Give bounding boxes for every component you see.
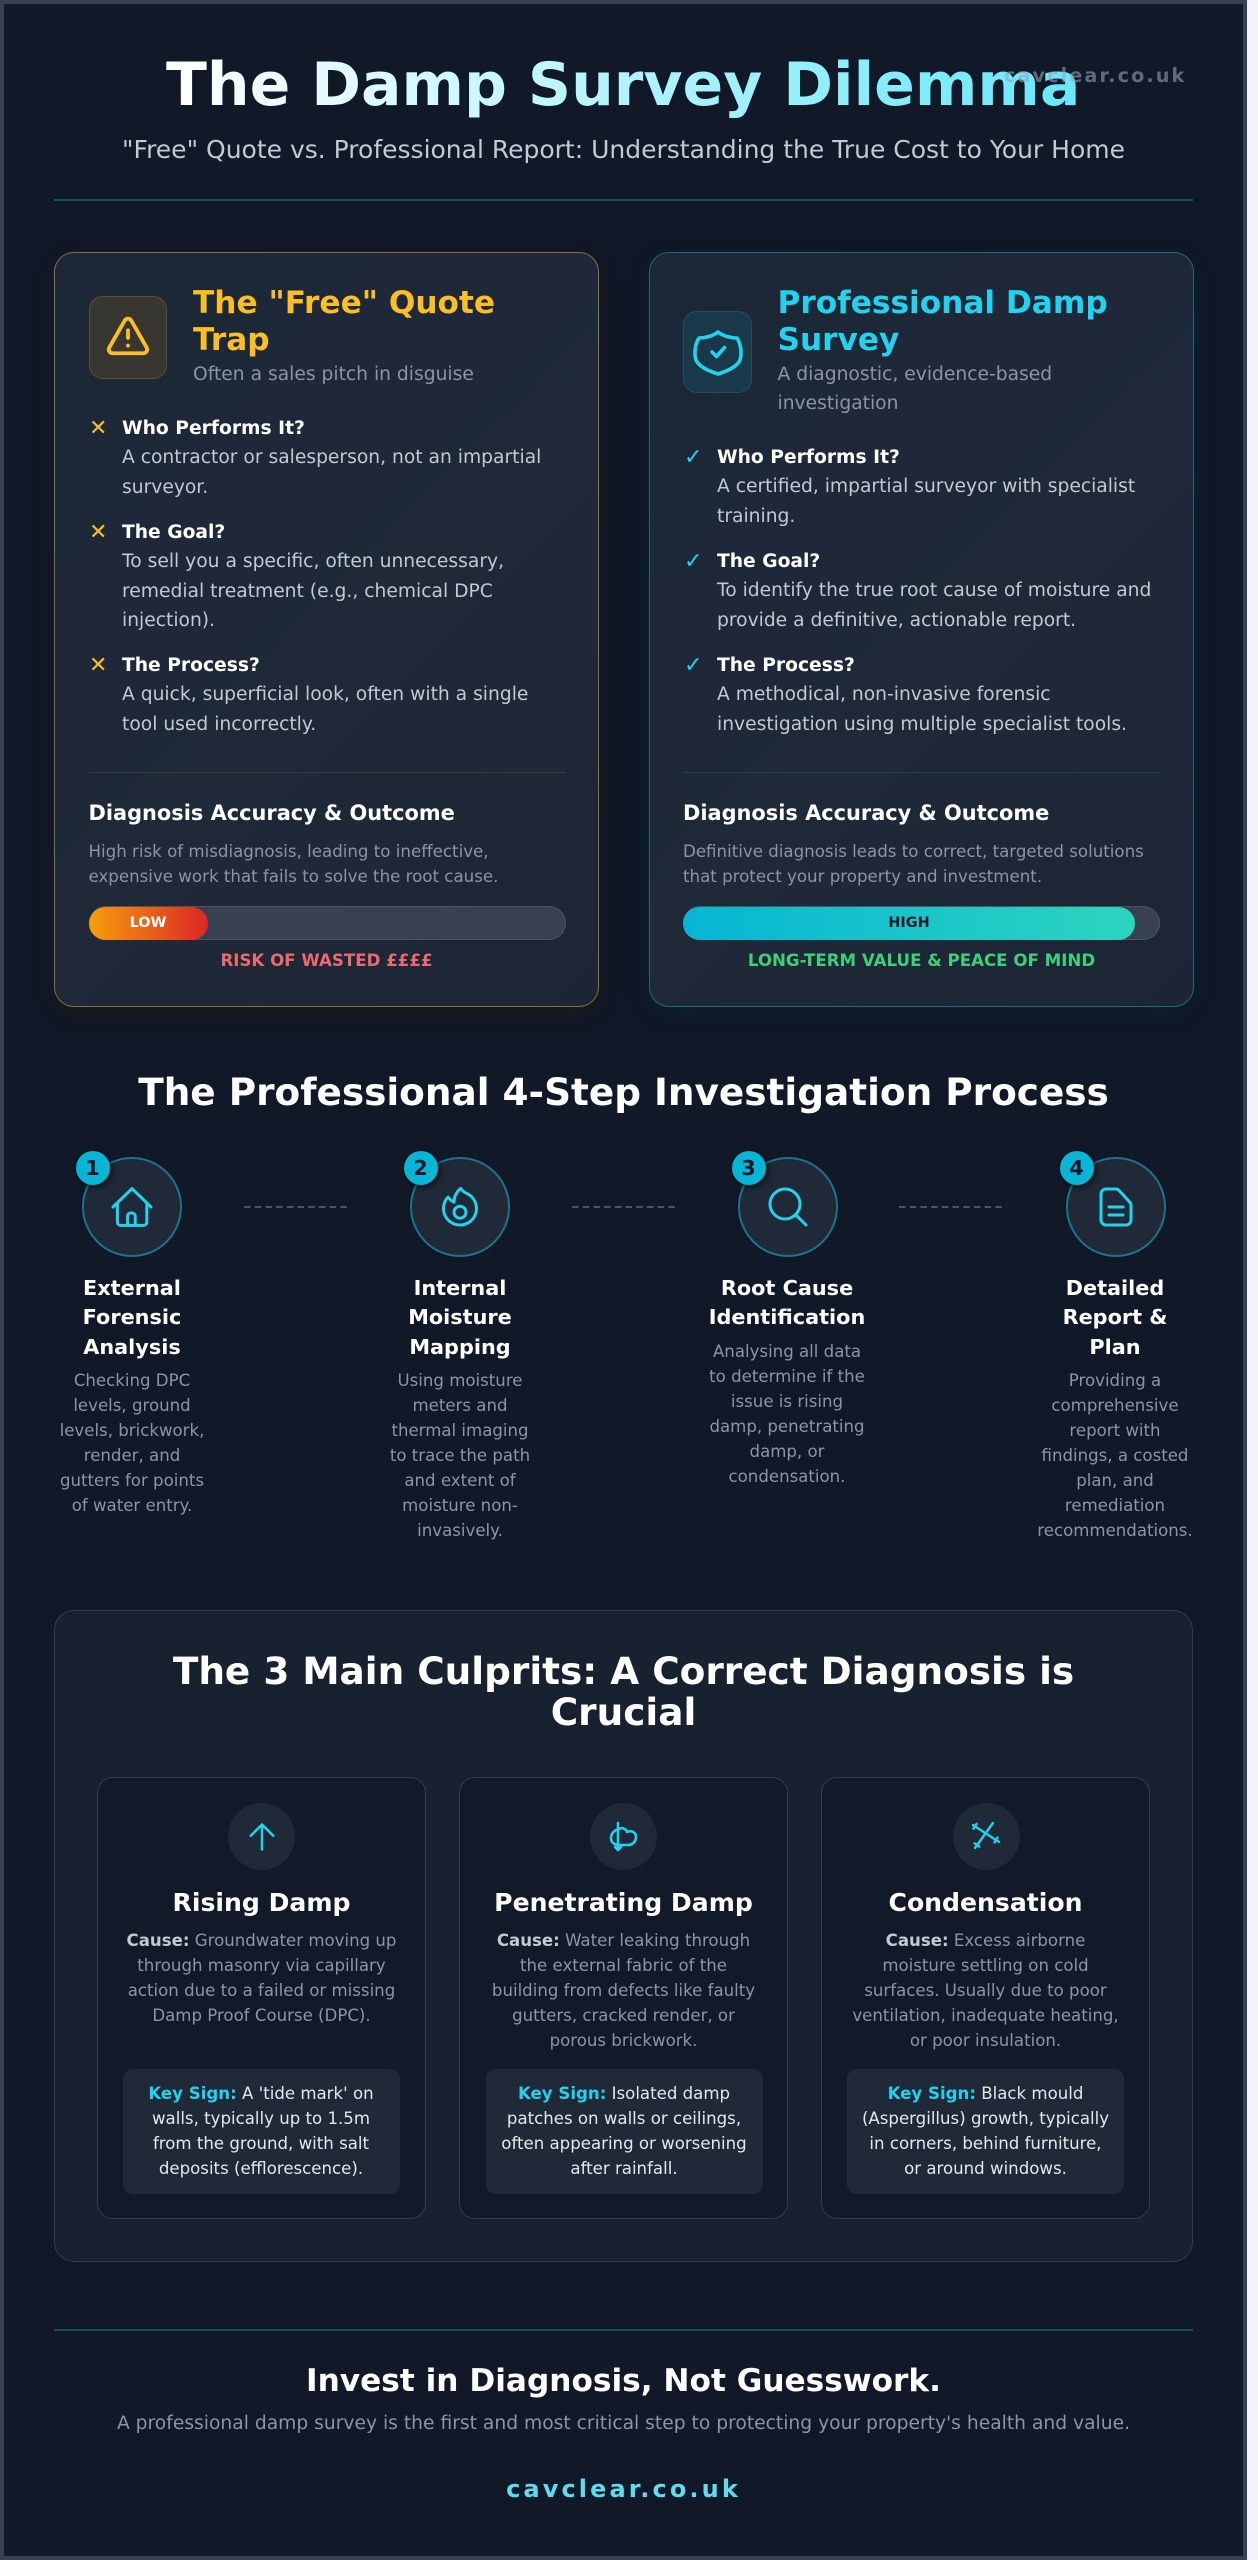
key sign: condensation: or around windows.	[904, 2159, 1067, 2178]
key sign: condensation: in corners, behind furniture,	[869, 2134, 1102, 2153]
list item: the process	[717, 655, 1127, 735]
step 2 text: to trace the path	[390, 1446, 530, 1465]
list mark: who: ✓	[684, 445, 702, 470]
cause: rising damp: action due to a failed or missing	[128, 1981, 395, 2000]
step 1 text: render, and	[84, 1446, 180, 1465]
cause: condensation: Cause: Excess airborne	[886, 1931, 1085, 1950]
cause: penetrating damp: gutters, cracked render, or	[512, 2006, 735, 2025]
footer url: cavclear.co.uk	[506, 2475, 741, 2503]
step 4 text: Providing a	[1069, 1371, 1161, 1390]
cause: rising damp: Damp Proof Course (DPC).	[152, 2006, 371, 2025]
cause: penetrating damp: building from defects like faulty	[492, 1981, 755, 2000]
cause: condensation: or poor insulation.	[910, 2031, 1061, 2050]
list item: who performs it: training.	[717, 506, 795, 527]
step 4 title: Detailed	[1066, 1276, 1164, 1300]
list item: who performs it	[717, 447, 1135, 527]
step 4 text: findings, a costed	[1042, 1446, 1188, 1465]
step 2 title	[408, 1276, 512, 1359]
icon: shield check	[683, 311, 752, 393]
panel: culprits	[54, 1610, 1193, 2262]
key sign: rising damp	[122, 2069, 400, 2194]
card: penetrating damp	[459, 1777, 788, 2219]
list item: the goal	[716, 551, 1151, 631]
heading: professional damp survey: Professional Damp	[778, 285, 1108, 321]
watermark: cavclear.co.uk	[1004, 64, 1186, 87]
step 4 badge	[1060, 1150, 1094, 1184]
step 1 text: levels, ground	[73, 1396, 191, 1415]
bar: high accuracy	[683, 906, 1160, 940]
step 4 title: Plan	[1089, 1335, 1141, 1359]
step 1 text	[60, 1371, 204, 1515]
step 2 title: Mapping	[409, 1335, 511, 1359]
list item: who performs it: Who Performs It?	[717, 447, 900, 468]
step 3 text	[709, 1342, 865, 1486]
key sign: penetrating damp: Key Sign: Isolated damp	[518, 2084, 730, 2103]
step 1 title	[83, 1276, 181, 1359]
cause: condensation	[852, 1931, 1119, 2050]
list item: the goal: To sell you a specific, often unnecessary,	[122, 551, 504, 572]
key sign: penetrating damp: patches on walls or ceilings,	[507, 2109, 741, 2128]
key sign: rising damp: from the ground, with salt	[153, 2134, 369, 2153]
connector 3	[899, 1206, 1002, 1208]
step 2 title: Moisture	[408, 1305, 512, 1329]
list mark: process: ✕	[89, 653, 107, 678]
heading: professional damp survey	[778, 285, 1108, 358]
step 3 circle	[738, 1157, 838, 1257]
footer text: A professional damp survey is the first and most critical step to protecting your property's health and value.	[117, 2412, 1130, 2434]
cause: rising damp: Cause: Groundwater moving up	[127, 1931, 396, 1950]
heading: free quote trap: Trap	[193, 322, 270, 358]
cause: condensation: ventilation, inadequate heating,	[852, 2006, 1119, 2025]
heading: professional damp survey: Survey	[778, 322, 899, 358]
list item: who performs it: surveyor.	[122, 477, 208, 498]
list mark: goal: ✕	[89, 520, 107, 545]
list item: the process	[122, 655, 528, 735]
list item: the goal: injection).	[122, 610, 215, 631]
step 3 badge	[732, 1150, 766, 1184]
subheading: professional	[778, 364, 1052, 414]
subheading: free quote trap: Often a sales pitch in disguise	[193, 364, 474, 385]
step 3 text: damp, penetrating	[709, 1417, 865, 1436]
title: penetrating damp: Penetrating Damp	[494, 1888, 753, 1917]
label: long-term value: LONG-TERM VALUE & PEACE OF MIND	[748, 951, 1095, 970]
header rule	[54, 199, 1193, 201]
list item: the process: tool used incorrectly.	[122, 714, 316, 735]
key sign: rising damp: walls, typically up to 1.5m	[152, 2109, 370, 2128]
subheading: professional: A diagnostic, evidence-based	[778, 364, 1052, 385]
cause: penetrating damp: the external fabric of the	[520, 1956, 727, 1975]
list item: who performs it	[122, 418, 541, 498]
step 2 badge	[404, 1150, 438, 1184]
connector 1	[244, 1206, 347, 1208]
list mark: goal: ✓	[684, 549, 702, 574]
title: condensation: Condensation	[889, 1888, 1082, 1917]
step 4 title	[1063, 1276, 1167, 1359]
icon: crossed snow	[953, 1803, 1020, 1870]
step 3 text: Analysing all data	[713, 1342, 861, 1361]
step 3 text: damp, or	[750, 1442, 824, 1461]
step 2 text: and extent of	[404, 1471, 516, 1490]
icon: cloud	[590, 1803, 657, 1870]
step 4 badge: 4	[1069, 1156, 1084, 1180]
list item: who performs it: Who Performs It?	[122, 418, 305, 439]
footer heading: Invest in Diagnosis, Not Guesswork.	[306, 2363, 941, 2399]
step 2 text: Using moisture	[398, 1371, 522, 1390]
step 1 text: levels, brickwork,	[60, 1421, 204, 1440]
heading: diagnosis accuracy left: Diagnosis Accuracy & Outcome	[88, 801, 455, 825]
step 3 title	[709, 1276, 865, 1329]
step 1 badge: 1	[85, 1156, 100, 1180]
step 4 text: recommendations.	[1037, 1521, 1193, 1540]
heading: investigation process: The Professional 4-Step Investigation Process	[138, 1070, 1109, 1114]
list item: the process: A quick, superficial look, often with a single	[122, 684, 528, 705]
icon: arrow up	[228, 1803, 295, 1870]
text: diagnosis right: Definitive diagnosis leads to correct, targeted solutions	[683, 842, 1144, 861]
list mark: process: ✓	[684, 653, 702, 678]
bar: low accuracy: LOW	[130, 915, 166, 931]
step 1 badge	[76, 1150, 110, 1184]
card: rising damp	[97, 1777, 426, 2219]
heading: culprits: Crucial	[551, 1690, 696, 1734]
step 2 text: moisture non-	[402, 1496, 518, 1515]
step 1 text: gutters for points	[60, 1471, 204, 1490]
key sign: condensation: Key Sign: Black mould	[888, 2084, 1083, 2103]
card: condensation	[821, 1777, 1150, 2219]
list item: the goal: remedial treatment (e.g., chemical DPC	[122, 581, 493, 602]
key sign: condensation: (Aspergillus) growth, typically	[862, 2109, 1109, 2128]
heading: culprits: The 3 Main Culprits: A Correct Diagnosis is	[173, 1649, 1074, 1693]
list item: the goal: To identify the true root cause of moisture and	[717, 580, 1151, 601]
list item: the goal: The Goal?	[717, 551, 820, 572]
footer rule	[54, 2329, 1193, 2331]
step 2 text: meters and	[412, 1396, 508, 1415]
step 1 title: Analysis	[83, 1335, 181, 1359]
step 4 text: plan, and	[1076, 1471, 1154, 1490]
cause: rising damp: through masonry via capillary	[137, 1956, 386, 1975]
text: diagnosis right	[683, 842, 1144, 886]
cause: penetrating damp: porous brickwork.	[550, 2031, 697, 2050]
key sign: rising damp: deposits (efflorescence).	[159, 2159, 363, 2178]
cause: penetrating damp	[492, 1931, 755, 2050]
step 3 text: condensation.	[729, 1467, 845, 1486]
step 3 badge: 3	[741, 1156, 756, 1180]
step 3 text: to determine if the	[709, 1367, 865, 1386]
heading: culprits	[173, 1649, 1074, 1734]
step 2 title: Internal	[414, 1276, 506, 1300]
list item: the process: The Process?	[717, 655, 855, 676]
bar: low accuracy	[88, 906, 566, 940]
list item: who performs it: A contractor or salesperson, not an impartial	[122, 447, 541, 468]
list item: the process: The Process?	[122, 655, 260, 676]
list item: the process: A methodical, non-invasive forensic	[717, 684, 1051, 705]
step 4 text	[1037, 1371, 1193, 1540]
step 1 circle	[82, 1157, 182, 1257]
cause: condensation: surfaces. Usually due to poor	[864, 1981, 1107, 2000]
text: diagnosis left: expensive work that fails to solve the root cause.	[88, 867, 498, 886]
key sign: rising damp: Key Sign: A 'tide mark' on	[148, 2084, 374, 2103]
panel: free quote trap	[54, 252, 599, 1007]
step 1 text: Checking DPC	[74, 1371, 190, 1390]
step 2 text	[390, 1371, 530, 1540]
panel: professional survey	[649, 252, 1194, 1007]
step 3 title: Identification	[709, 1305, 865, 1329]
title: rising damp: Rising Damp	[173, 1888, 350, 1917]
text: diagnosis left: High risk of misdiagnosis, leading to ineffective,	[88, 842, 489, 861]
label: risk of wasted money: RISK OF WASTED ££££	[220, 951, 433, 970]
cause: condensation: moisture settling on cold	[882, 1956, 1089, 1975]
heading: diagnosis accuracy right: Diagnosis Accuracy & Outcome	[683, 801, 1049, 825]
step 2 circle	[410, 1157, 510, 1257]
icon: warning triangle	[89, 296, 167, 379]
step 3 text: issue is rising	[731, 1392, 843, 1411]
bar: high accuracy: HIGH	[888, 915, 930, 931]
step 4 title: Report &	[1063, 1305, 1167, 1329]
step 2 badge: 2	[413, 1156, 428, 1180]
step 3 title: Root Cause	[721, 1276, 853, 1300]
heading: free quote trap: The "Free" Quote	[193, 285, 495, 321]
step 4 text: report with	[1069, 1421, 1161, 1440]
subheading: professional: investigation	[778, 393, 898, 414]
key sign: penetrating damp	[486, 2069, 762, 2194]
heading: free quote trap	[193, 285, 495, 358]
key sign: condensation	[847, 2069, 1124, 2194]
step 2 text: invasively.	[417, 1521, 503, 1540]
list item: the goal: The Goal?	[122, 522, 225, 543]
step 4 text: remediation	[1065, 1496, 1165, 1515]
connector 2	[572, 1206, 675, 1208]
key sign: penetrating damp: after rainfall.	[570, 2159, 678, 2178]
step 1 title: Forensic	[83, 1305, 181, 1329]
title: The Damp Survey Dilemma	[166, 50, 1080, 120]
subtitle: "Free" Quote vs. Professional Report: Understanding the True Cost to Your Home	[122, 135, 1125, 164]
list item: the process: investigation using multiple specialist tools.	[717, 714, 1127, 735]
list mark: who: ✕	[89, 416, 107, 441]
list item: who performs it: A certified, impartial surveyor with specialist	[717, 476, 1135, 497]
cause: penetrating damp: Cause: Water leaking through	[497, 1931, 750, 1950]
step 1 title: External	[83, 1276, 181, 1300]
step 2 text: thermal imaging	[391, 1421, 529, 1440]
step 1 text: of water entry.	[72, 1496, 192, 1515]
list item: the goal	[122, 522, 504, 631]
key sign: penetrating damp: often appearing or worsening	[501, 2134, 747, 2153]
cause: rising damp	[127, 1931, 396, 2025]
step 4 circle	[1066, 1157, 1166, 1257]
text: diagnosis right: that protect your property and investment.	[683, 867, 1042, 886]
step 4 text: comprehensive	[1051, 1396, 1179, 1415]
text: diagnosis left	[88, 842, 498, 886]
list item: the goal: provide a definitive, actionable report.	[717, 610, 1076, 631]
